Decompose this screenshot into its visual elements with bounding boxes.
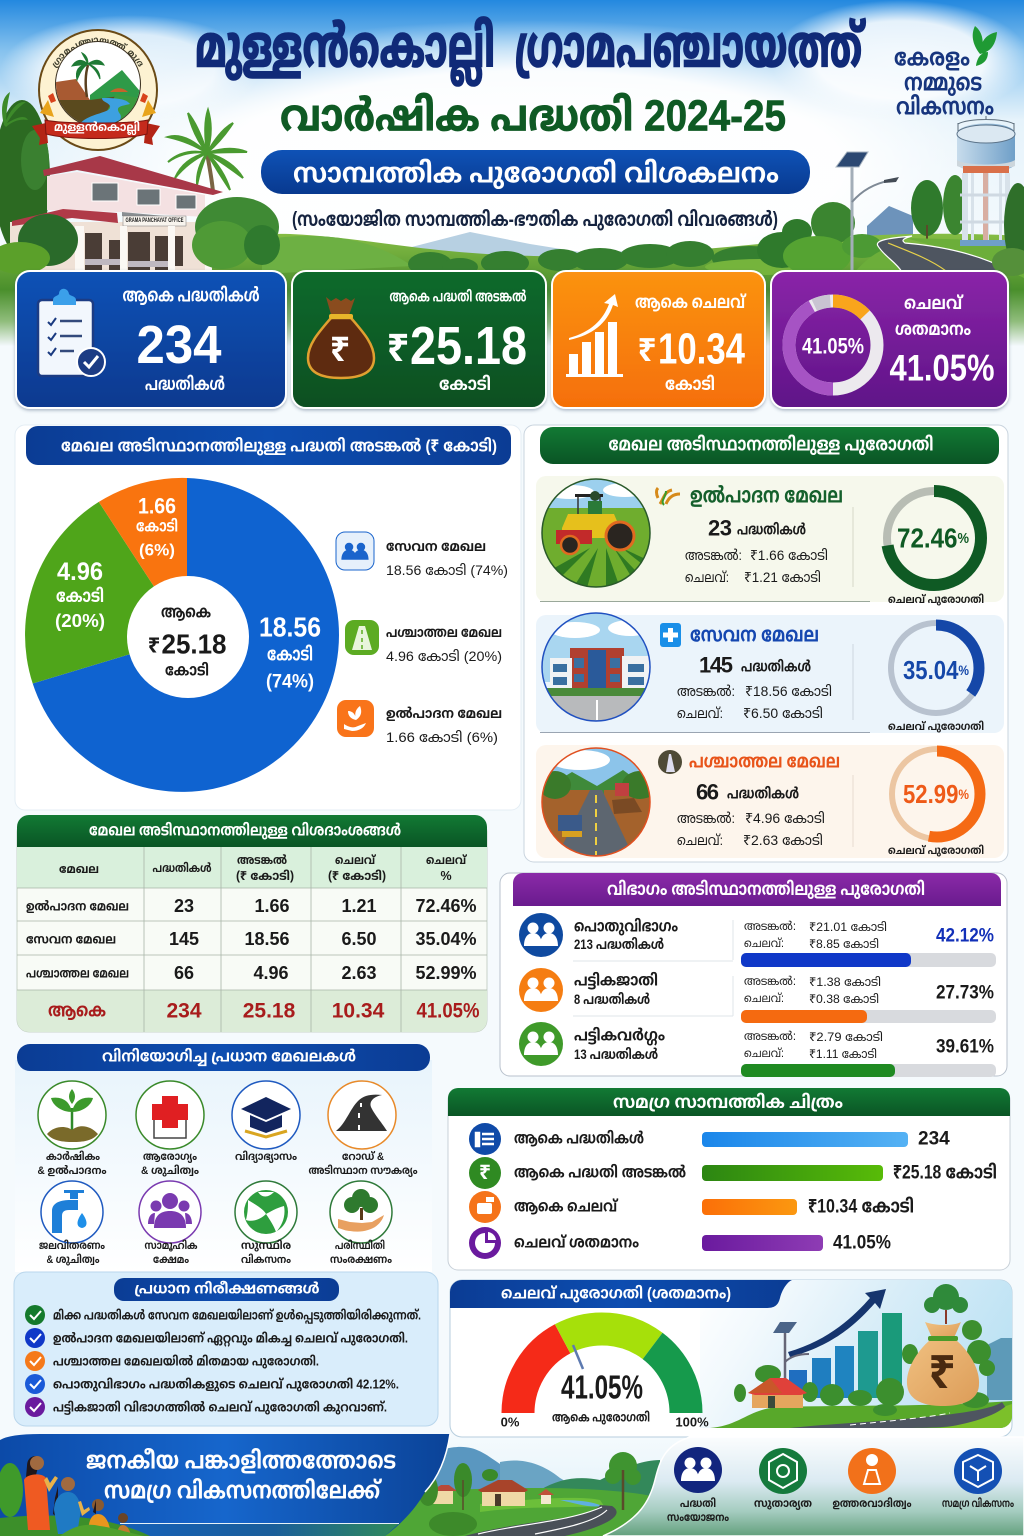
row: service sector: അടങ്കൽ: xyxy=(677,683,735,699)
row: infrastructure sector: 66 xyxy=(696,780,719,804)
table: sector-wise details: (₹ കോടി) xyxy=(328,868,386,883)
gauge chart: 100% xyxy=(675,1414,709,1430)
icon: sustainable development: വികസനം xyxy=(241,1254,291,1266)
logo xyxy=(32,29,160,151)
pie chart: കോടി xyxy=(165,662,209,680)
icon: transparency xyxy=(754,1448,812,1511)
table: sector-wise details: 1.21 xyxy=(341,896,377,916)
row: scheduled tribe xyxy=(519,1022,996,1077)
observation 1: മിക്ക പദ്ധതികൾ സേവന മേഖലയിലാണ് ഉൾപ്പെടുത്തിയിരിക്കുന്നത്. xyxy=(53,1308,421,1324)
donut: 35.04%: ചെലവ് പുരോഗതി xyxy=(888,720,984,733)
gauge chart: ആകെ പുരോഗതി xyxy=(552,1410,650,1426)
table: sector-wise details: 35.04% xyxy=(415,929,477,949)
icon: accountability xyxy=(832,1448,912,1510)
stat card: total outlay: 25.18 xyxy=(410,316,527,376)
row: total outlay: ആകെ പദ്ധതി അടങ്കൽ xyxy=(514,1164,686,1182)
row: production sector: ₹1.21 കോടി xyxy=(744,569,821,585)
legend: production sector: ഉൽപാദന മേഖല xyxy=(386,705,502,721)
legend: service sector: 18.56 കോടി (74%) xyxy=(386,562,508,578)
panchayat office building: GRAMA PANCHAYAT OFFICE xyxy=(126,218,184,224)
row: scheduled tribe: 13 പദ്ധതികൾ xyxy=(574,1046,658,1062)
pie chart: ₹ xyxy=(148,634,160,658)
table: sector-wise details: 1.66 xyxy=(254,896,290,916)
stat card: total outlay: ₹ xyxy=(330,331,350,369)
icon: health: ആരോഗ്യം xyxy=(143,1151,197,1164)
photo: public building xyxy=(542,612,652,724)
slogan with leaf: കേരളം xyxy=(894,44,970,72)
observation 4: പൊതുവിഭാഗം പദ്ധതികളുടെ ചെലവ് പുരോഗതി 42.12%. xyxy=(53,1376,399,1392)
table: sector-wise details: 25.18 xyxy=(243,1000,296,1022)
icon: social welfare xyxy=(139,1181,201,1266)
icon: holistic development xyxy=(942,1448,1014,1510)
icon: health xyxy=(136,1081,204,1177)
legend: infrastructure sector xyxy=(345,620,502,664)
gauge chart xyxy=(501,1329,709,1430)
pie chart: 4.96 xyxy=(57,558,103,586)
stat card: total schemes: ആകെ പദ്ധതികൾ xyxy=(122,286,260,306)
pie chart: 25.18 xyxy=(162,628,226,660)
table: sector-wise details: മേഖല xyxy=(59,862,99,876)
panel heading: ചെലവ് പുരോഗതി (ശതമാനം) xyxy=(501,1284,731,1302)
table: sector-wise details: ചെലവ് xyxy=(335,853,377,867)
logo: ഗ്രാമപഞ്ചായത്ത് മുദ്ര xyxy=(52,38,143,68)
row: total schemes: 234 xyxy=(918,1128,950,1150)
sector title xyxy=(656,482,843,508)
panel heading xyxy=(513,873,1001,906)
photo: tractor in field xyxy=(540,478,652,588)
row: infrastructure sector: പദ്ധതികൾ xyxy=(727,786,799,802)
row: service sector: 145 xyxy=(699,652,733,678)
stat card: expenditure percent: 41.05% xyxy=(890,348,994,388)
stat card: total outlay: കോടി xyxy=(439,374,491,394)
table: sector-wise details: മേഖല അടിസ്ഥാനത്തിലുള്ള വിശദാംശങ്ങൾ xyxy=(89,822,401,840)
pie chart: (6%) xyxy=(139,540,175,560)
panel heading xyxy=(448,1088,1010,1116)
panel heading: മേഖല അടിസ്ഥാനത്തിലുള്ള പുരോഗതി xyxy=(608,434,934,456)
observation 5 xyxy=(25,1397,387,1417)
table: sector-wise details: സേവന മേഖല xyxy=(26,932,116,946)
row: expenditure percent: ചെലവ് ശതമാനം xyxy=(514,1234,639,1252)
row: scheduled caste: പട്ടികജാതി xyxy=(574,972,658,990)
title xyxy=(195,14,866,86)
stat card: expenditure percent: ചെലവ് xyxy=(904,293,964,313)
pie chart: 18.56 xyxy=(259,612,321,642)
row: scheduled tribe: അടങ്കൽ: xyxy=(744,1031,796,1043)
observation 1 xyxy=(25,1305,421,1325)
icon: social welfare: ക്ഷേമം xyxy=(153,1254,189,1266)
row: service sector: പദ്ധതികൾ xyxy=(741,658,811,676)
pie chart xyxy=(25,478,339,792)
row: general category: ചെലവ്: xyxy=(744,937,784,950)
row: production sector: പദ്ധതികൾ xyxy=(737,522,806,538)
row: scheduled tribe: പട്ടികവർഗ്ഗം xyxy=(574,1026,665,1046)
table: sector-wise details: പദ്ധതികൾ xyxy=(152,861,212,875)
table: sector-wise details: പശ്ചാത്തല മേഖല xyxy=(26,966,129,980)
row: scheduled caste: 8 പദ്ധതികൾ xyxy=(574,991,650,1007)
table: sector-wise details: 234 xyxy=(166,1000,202,1022)
stat card: total schemes xyxy=(16,271,286,408)
slogan with leaf: വികസനം xyxy=(896,94,994,120)
donut: 52.99%: 52.99% xyxy=(903,779,969,809)
panel: expenditure progress gauge xyxy=(450,1280,1012,1437)
donut: 72.46%: ചെലവ് പുരോഗതി xyxy=(888,593,984,606)
panel heading: പ്രധാന നിരീക്ഷണങ്ങൾ xyxy=(134,1280,320,1298)
slogan banner: ജനകീയ പങ്കാളിത്തത്തോടെ xyxy=(86,1448,396,1474)
row: general category: 42.12% xyxy=(936,926,994,946)
row: scheduled caste: ചെലവ്: xyxy=(744,992,784,1005)
table: sector-wise details: 66 xyxy=(174,963,194,983)
panel: sector-wise progress xyxy=(524,425,1008,862)
table: sector-wise details: ആകെ xyxy=(48,1000,106,1022)
row: expenditure percent xyxy=(469,1227,891,1259)
table: sector-wise details: ഉൽപാദന മേഖല xyxy=(26,898,129,914)
row: general category: ₹21.01 കോടി xyxy=(809,920,887,934)
row: infrastructure sector: ₹2.63 കോടി xyxy=(743,832,823,848)
left trees behind building xyxy=(0,92,50,256)
row: production sector: 23 xyxy=(708,516,732,540)
row: general category xyxy=(519,913,996,967)
icon: environment protection xyxy=(330,1181,392,1266)
palm tree xyxy=(168,110,247,192)
stat card: total expenditure: കോടി xyxy=(665,374,715,394)
panel heading xyxy=(17,1044,430,1071)
icon: education xyxy=(232,1081,300,1164)
table: sector-wise details: അടങ്കൽ xyxy=(237,853,287,867)
icon: health: & ശുചിത്വം xyxy=(141,1165,199,1177)
photo: road construction xyxy=(542,748,650,856)
table: sector-wise details: 145 xyxy=(169,929,199,949)
legend: infrastructure sector: പശ്ചാത്തല മേഖല xyxy=(386,624,502,640)
table: sector-wise details: 41.05% xyxy=(416,1000,480,1022)
row: scheduled caste: ₹0.38 കോടി xyxy=(809,992,879,1006)
sector title: പശ്ചാത്തല മേഖല xyxy=(689,752,840,772)
title: മുള്ളൻകൊല്ലി xyxy=(195,14,495,86)
observation 5: പട്ടികജാതി വിഭാഗത്തിൽ ചെലവ് പുരോഗതി കുറവാണ്. xyxy=(53,1400,387,1416)
row: total outlay: ₹25.18 കോടി xyxy=(893,1162,997,1184)
row: total expenditure: ₹10.34 കോടി xyxy=(808,1196,914,1218)
table: sector-wise details: 4.96 xyxy=(253,963,289,983)
pie chart: (74%) xyxy=(266,672,314,692)
row: service sector: ₹18.56 കോടി xyxy=(745,683,832,699)
observation 3: പശ്ചാത്തല മേഖലയിൽ മിതമായ പുരോഗതി. xyxy=(53,1354,319,1370)
icon: agriculture xyxy=(38,1081,107,1177)
icon: water supply: & ശുചിത്വം xyxy=(46,1254,100,1266)
stat card: total outlay xyxy=(292,271,546,408)
panel: overall financial picture xyxy=(448,1088,1010,1270)
icon: roads xyxy=(308,1081,418,1178)
row: total outlay xyxy=(469,1157,997,1189)
row: production sector: അടങ്കൽ: xyxy=(685,547,742,563)
header landscape background xyxy=(0,0,1024,346)
pie chart: (20%) xyxy=(55,611,105,631)
panel: major sectors of allocation xyxy=(15,1044,432,1272)
stat card: total expenditure: ആകെ ചെലവ് xyxy=(635,292,747,312)
trees in front of building xyxy=(0,197,280,274)
stat card: expenditure percent: ശതമാനം xyxy=(895,319,971,339)
row: expenditure percent: 41.05% xyxy=(833,1232,891,1254)
row: general category: ₹8.85 കോടി xyxy=(809,937,879,951)
icon: agriculture: & ഉൽപാദനം xyxy=(38,1165,107,1177)
icon: environment protection: സംരക്ഷണം xyxy=(330,1254,392,1266)
panel heading xyxy=(540,427,999,464)
icon: accountability: ഉത്തരവാദിത്വം xyxy=(832,1497,912,1510)
row: infrastructure sector: അടങ്കൽ: xyxy=(677,810,735,826)
row: general category: 213 പദ്ധതികൾ xyxy=(574,936,664,952)
icon: education: വിദ്യാഭ്യാസം xyxy=(235,1151,297,1164)
slogan with leaf: നമ്മുടെ xyxy=(904,70,982,96)
icon: agriculture: കാർഷികം xyxy=(46,1151,100,1163)
icon: roads: അടിസ്ഥാന സൗകര്യം xyxy=(308,1165,418,1178)
observation 2: ഉൽപാദന മേഖലയിലാണ് ഏറ്റവും മികച്ച ചെലവ് പുരോഗതി. xyxy=(53,1330,408,1348)
row: service sector xyxy=(536,612,1004,733)
icon: scheme integration: സംയോജനം xyxy=(667,1512,729,1524)
table: sector-wise details xyxy=(17,815,487,1032)
gauge chart: 0% xyxy=(501,1414,520,1430)
table: sector-wise details: % xyxy=(440,869,452,883)
row: total schemes: ആകെ പദ്ധതികൾ xyxy=(514,1130,644,1148)
illustration: growth landscape xyxy=(700,1280,1012,1428)
solar street light xyxy=(836,152,899,272)
legend: infrastructure sector: 4.96 കോടി (20%) xyxy=(386,648,502,664)
row: total expenditure: ആകെ ചെലവ് xyxy=(514,1198,619,1216)
sector title xyxy=(660,623,819,647)
row: production sector: ചെലവ്: xyxy=(685,569,729,585)
icon: environment protection: പരിസ്ഥിതി xyxy=(335,1240,385,1252)
stat card: total outlay: ആകെ പദ്ധതി അടങ്കൽ xyxy=(390,288,526,306)
row: infrastructure sector xyxy=(536,745,1004,858)
stat card: total expenditure xyxy=(552,271,765,408)
gauge chart: 41.05% xyxy=(561,1368,643,1406)
row: service sector: ചെലവ്: xyxy=(677,705,723,721)
sector title: സേവന മേഖല xyxy=(690,624,819,646)
row: total expenditure xyxy=(469,1191,914,1223)
observation 2 xyxy=(25,1328,408,1348)
panchayat office building xyxy=(10,156,223,272)
observation 3 xyxy=(25,1351,319,1371)
panel: principles xyxy=(603,1437,1024,1536)
sub caption: (സംയോജിത സാമ്പത്തിക-ഭൗതിക പുരോഗതി വിവരങ്ങൾ) xyxy=(292,209,778,231)
legend: service sector: സേവന മേഖല xyxy=(386,538,486,554)
table: sector-wise details: 6.50 xyxy=(341,929,377,949)
panel heading xyxy=(26,426,511,465)
table: sector-wise details: 23 xyxy=(174,896,194,916)
row: scheduled tribe: ചെലവ്: xyxy=(744,1047,784,1060)
pie chart: കോടി xyxy=(136,518,178,536)
icon: transparency: സുതാര്യത xyxy=(754,1498,812,1511)
row: scheduled caste: ₹1.38 കോടി xyxy=(809,975,881,989)
stat card: total expenditure: 10.34 xyxy=(658,324,745,374)
stat card: total expenditure: ₹ xyxy=(638,332,656,368)
donut: 35.04% xyxy=(888,623,984,733)
table: sector-wise details: 18.56 xyxy=(244,929,290,949)
table: sector-wise details: 10.34 xyxy=(332,1000,385,1022)
row: infrastructure sector: ₹4.96 കോടി xyxy=(745,810,825,826)
panel heading: സമഗ്ര സാമ്പത്തിക ചിത്രം xyxy=(613,1092,843,1112)
donut: 72.46%: 72.46% xyxy=(897,522,969,554)
donut: 35.04%: 35.04% xyxy=(903,655,969,685)
panel heading xyxy=(450,1280,792,1308)
row: scheduled caste xyxy=(519,968,996,1023)
panel: category-wise progress xyxy=(500,873,1007,1077)
water tower xyxy=(957,116,1024,276)
pie chart: ആകെ xyxy=(161,602,211,622)
panel heading: മേഖല അടിസ്ഥാനത്തിലുള്ള പദ്ധതി അടങ്കൽ (₹ കോടി) xyxy=(61,436,497,456)
heading pill xyxy=(261,150,810,194)
row: general category: പൊതുവിഭാഗം xyxy=(574,918,678,936)
table: sector-wise details: 72.46% xyxy=(415,896,477,916)
slogan banner xyxy=(0,1434,450,1536)
row: infrastructure sector: ചെലവ്: xyxy=(677,832,723,848)
row: scheduled tribe: ₹1.11 കോടി xyxy=(809,1047,877,1061)
stat card: expenditure percent xyxy=(771,271,1008,408)
table: sector-wise details: ചെലവ് xyxy=(426,853,468,867)
logo: മുള്ളൻകൊല്ലി xyxy=(54,120,140,135)
row: general category: അടങ്കൽ: xyxy=(744,921,796,933)
row: scheduled caste: 27.73% xyxy=(936,982,994,1004)
row: total schemes xyxy=(469,1123,950,1155)
panel: key observations xyxy=(14,1272,438,1426)
illustration: women and fields xyxy=(0,1456,150,1536)
pie chart: കോടി xyxy=(267,644,313,666)
pie chart: 1.66 xyxy=(138,494,176,518)
pie chart: കോടി xyxy=(56,586,104,606)
stat card: total schemes: പദ്ധതികൾ xyxy=(145,374,225,394)
row: service sector: ₹6.50 കോടി xyxy=(743,705,823,721)
stat card: expenditure percent: 41.05% xyxy=(802,334,864,358)
panel heading: വിനിയോഗിച്ച പ്രധാന മേഖലകൾ xyxy=(102,1048,356,1066)
icon: roads: റോഡ് & xyxy=(342,1150,384,1163)
icon: water supply xyxy=(39,1181,105,1266)
row: total outlay: ₹ xyxy=(479,1162,491,1184)
icon: water supply: ജലവിതരണം xyxy=(39,1240,105,1252)
illustration: growth landscape: ₹ xyxy=(929,1346,955,1398)
legend: service sector xyxy=(336,532,508,578)
icon: scheme integration: പദ്ധതി xyxy=(680,1497,716,1510)
icon: social welfare: സാമൂഹിക xyxy=(144,1240,198,1252)
slogan with leaf xyxy=(894,26,997,120)
donut: 72.46% xyxy=(887,491,984,606)
icon: scheme integration xyxy=(667,1447,729,1524)
stat card: total schemes: 234 xyxy=(136,315,222,375)
row: scheduled tribe: ₹2.79 കോടി xyxy=(809,1030,883,1044)
sector title xyxy=(658,750,840,774)
table: sector-wise details: (₹ കോടി) xyxy=(236,868,294,883)
subtitle year: വാർഷിക പദ്ധതി 2024-25 xyxy=(280,92,786,140)
icon: sustainable development xyxy=(235,1181,297,1266)
panel: sector-wise outlay xyxy=(15,425,521,810)
banner landscape xyxy=(380,1438,700,1536)
legend: production sector: 1.66 കോടി (6%) xyxy=(386,729,498,745)
sector title: ഉൽപാദന മേഖല xyxy=(690,482,843,508)
panel heading xyxy=(114,1278,339,1301)
heading pill: സാമ്പത്തിക പുരോഗതി വിശകലനം xyxy=(293,158,779,190)
observation 4 xyxy=(25,1374,399,1394)
icon: sustainable development: സുസ്ഥിര xyxy=(241,1240,291,1252)
row: scheduled tribe: 39.61% xyxy=(936,1036,994,1058)
row: production sector xyxy=(536,476,1004,606)
donut: 52.99%: ചെലവ് പുരോഗതി xyxy=(888,844,984,857)
slogan banner: സമഗ്ര വികസനത്തിലേക്ക് xyxy=(104,1478,382,1504)
legend: production sector xyxy=(337,700,502,745)
row: scheduled caste: അടങ്കൽ: xyxy=(744,976,796,988)
panel heading: വിഭാഗം അടിസ്ഥാനത്തിലുള്ള പുരോഗതി xyxy=(607,879,925,899)
stat card: total outlay: ₹ xyxy=(387,328,409,370)
table: sector-wise details: 52.99% xyxy=(415,963,477,983)
row: production sector: ₹1.66 കോടി xyxy=(750,547,828,563)
donut: 52.99% xyxy=(888,749,984,857)
table: sector-wise details: 2.63 xyxy=(341,963,377,983)
